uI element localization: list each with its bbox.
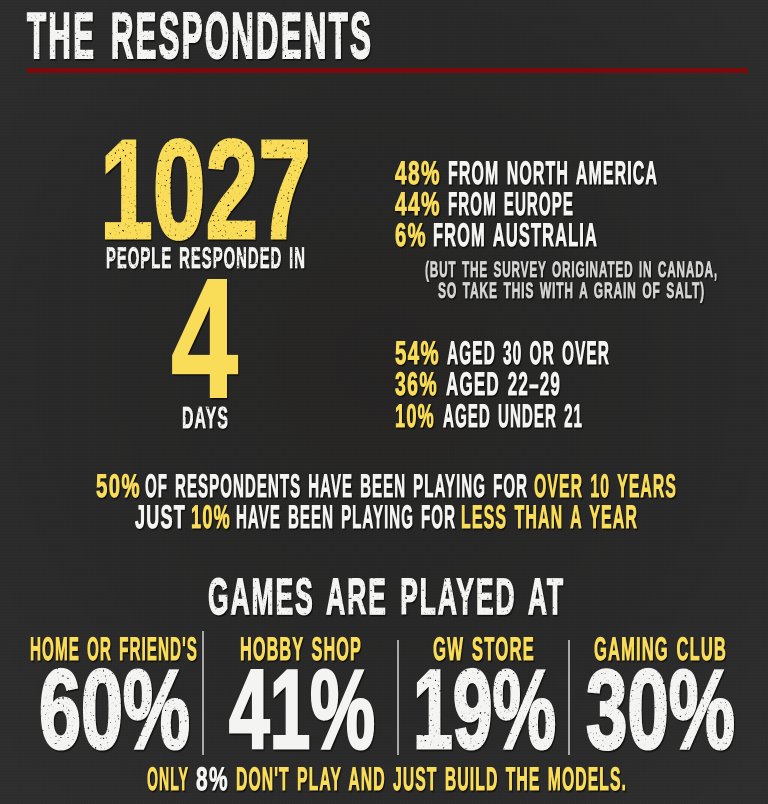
europe: 44% xyxy=(395,186,441,222)
venue label: HOBBY SHOP xyxy=(240,631,362,667)
number 1027: 1027 xyxy=(100,110,311,268)
stat: 1027 people responded in 4 days xyxy=(100,110,311,435)
line: over 10 years: 50% xyxy=(96,468,141,504)
line: less than a year: JUST xyxy=(135,499,186,535)
text: HOME OR FRIEND'S xyxy=(30,631,198,667)
list: ages xyxy=(395,335,610,434)
divider xyxy=(568,640,570,755)
line: less than a year: HAVE BEEN PLAYING FOR xyxy=(236,499,456,535)
footer note: ONLY xyxy=(147,761,189,797)
aged 30 or over: 54% xyxy=(395,335,440,371)
footer note: 8% xyxy=(196,761,229,797)
aged under 21: 10% xyxy=(395,398,435,434)
venue percent: 60% xyxy=(39,647,190,772)
aged 30 or over xyxy=(395,335,610,371)
australia: FROM AUSTRALIA xyxy=(433,217,598,253)
text: THE RESPONDENTS xyxy=(27,0,373,72)
aged 22-29: AGED 22–29 xyxy=(446,366,561,402)
label: days: DAYS xyxy=(182,400,229,435)
list: regions: FROM EUROPE xyxy=(448,186,574,222)
list: regions xyxy=(395,155,658,253)
australia: 6% xyxy=(395,217,427,253)
europe xyxy=(395,186,574,222)
divider xyxy=(202,631,204,755)
stat: 1027 people responded in 4 days: PEOPLE RESPONDED IN xyxy=(106,242,306,275)
australia xyxy=(395,217,598,253)
venue: home or friend's xyxy=(30,631,198,772)
aged 22-29: 36% xyxy=(395,366,438,402)
text: years playing xyxy=(96,468,677,535)
aged under 21 xyxy=(395,398,583,434)
venue label: GW STORE xyxy=(433,631,535,667)
footer note xyxy=(147,761,627,797)
number 4: 4 xyxy=(171,244,238,434)
venue percent: 41% xyxy=(229,647,375,772)
note: survey origin xyxy=(425,257,718,303)
venue: hobby shop xyxy=(229,631,375,772)
north america: 48% xyxy=(395,155,441,191)
north america xyxy=(395,155,658,191)
line: less than a year: 10% xyxy=(191,499,231,535)
heading underline xyxy=(27,68,748,73)
divider xyxy=(397,640,399,755)
list: ages: AGED UNDER 21 xyxy=(443,398,583,434)
venue: gaming club xyxy=(586,631,735,772)
venue: gw store xyxy=(413,631,556,772)
aged 22-29 xyxy=(395,366,561,402)
venue percent: 19% xyxy=(413,647,556,772)
